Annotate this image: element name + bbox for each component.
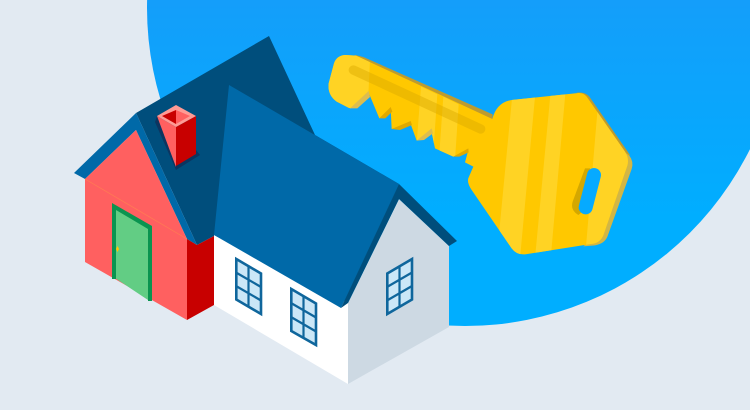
door frame: [112, 203, 152, 301]
house: [74, 36, 457, 384]
window 3: [387, 259, 412, 314]
key hole: [572, 168, 594, 215]
front roof: [214, 85, 399, 308]
door panel: [115, 208, 148, 300]
wall seam line: [85, 179, 187, 239]
door: [112, 203, 152, 301]
chimney shadow: [155, 116, 200, 170]
key head lower edge shadow: [583, 152, 632, 246]
blue circle: [147, 0, 750, 326]
key groove: [353, 70, 481, 129]
key: [328, 55, 632, 254]
chimney opening right: [176, 110, 190, 124]
chimney right face: [176, 116, 196, 166]
grey gable wall: [348, 199, 449, 384]
window 1: [236, 259, 261, 314]
window 2: [291, 289, 316, 345]
key head upper edge shadow: [577, 92, 630, 158]
chimney: [155, 105, 200, 170]
chimney opening left: [162, 110, 176, 124]
chimney rim: [157, 105, 196, 127]
key top edge shadow: [353, 55, 493, 120]
back roof: [136, 36, 399, 308]
key body: [328, 55, 628, 254]
red side wall: [85, 130, 187, 320]
white front wall: [214, 235, 348, 384]
door knob: [116, 246, 119, 252]
chimney left face: [157, 116, 176, 167]
dark red corner wall: [187, 236, 214, 320]
key tooth facets: [350, 91, 469, 157]
left gable trim: [74, 113, 197, 245]
key stripes: [328, 55, 628, 254]
right gable trim: [341, 184, 457, 308]
